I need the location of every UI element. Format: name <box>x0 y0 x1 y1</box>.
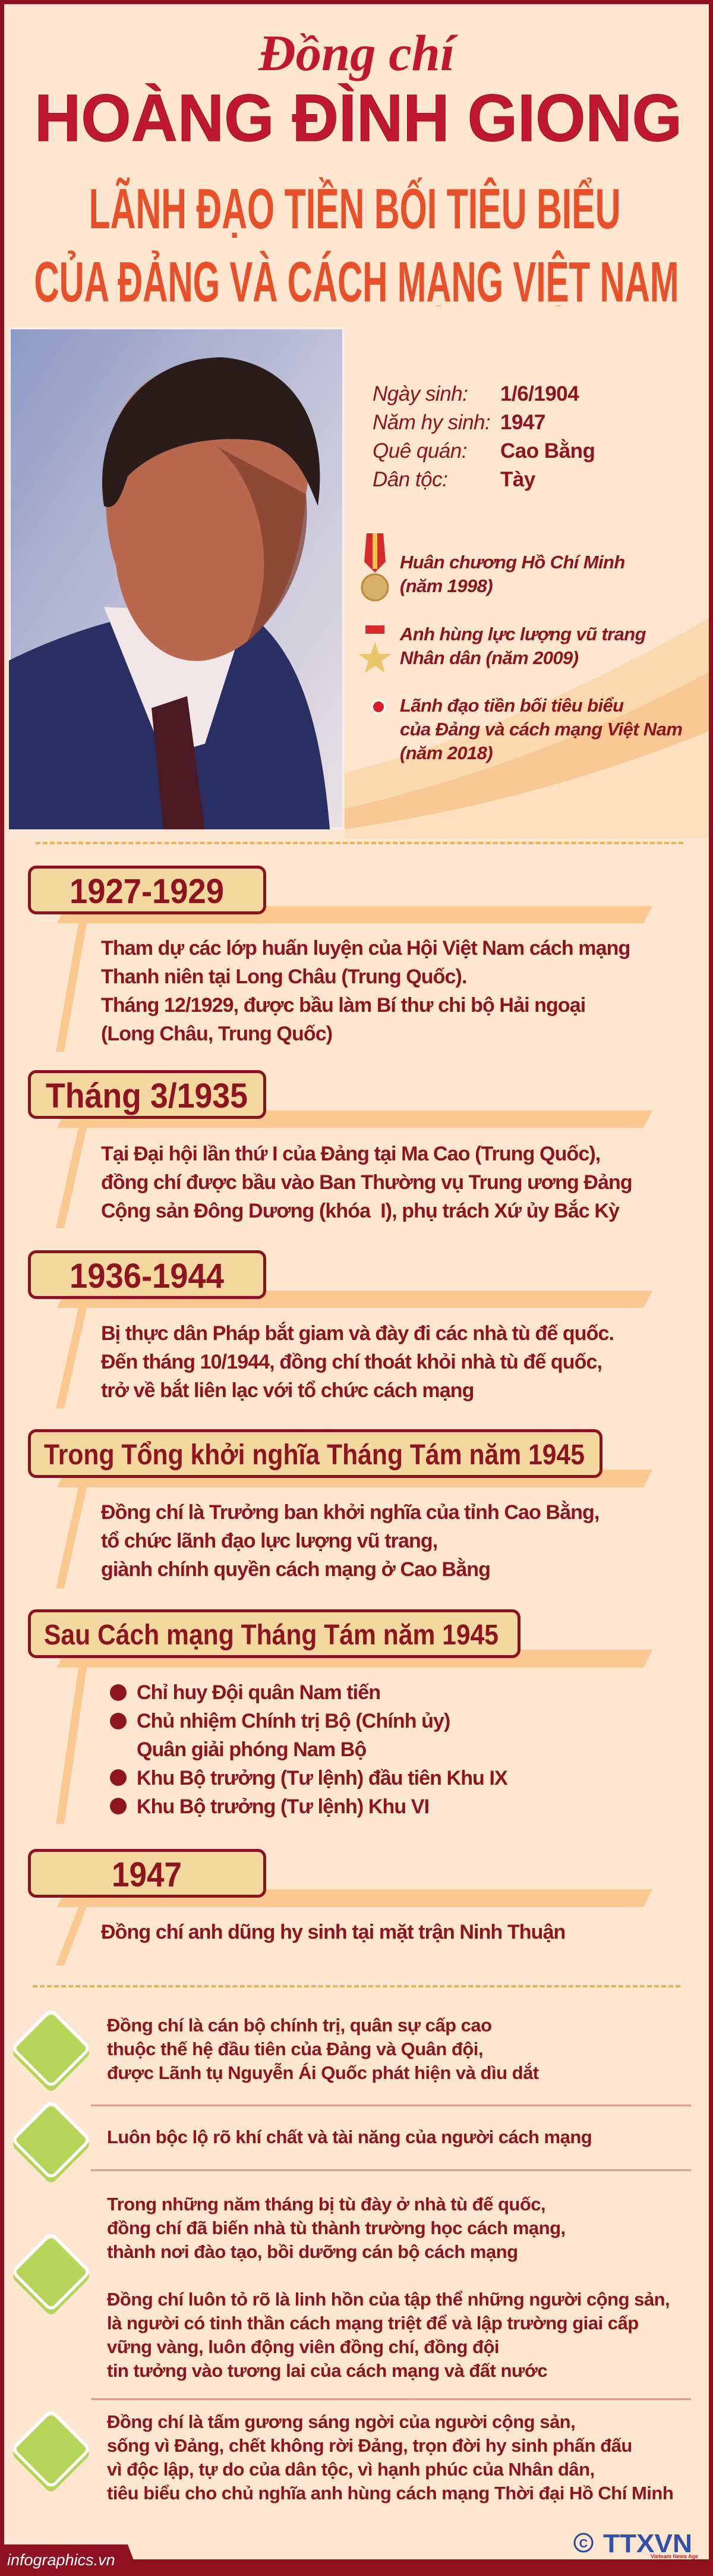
award 1 <box>400 552 625 596</box>
logo: TTXVN: C <box>579 2537 588 2550</box>
timeline section Tháng 3/1935: Tại Đại hội lần thứ I của Đảng tại Ma Cao (Trung Quốc), <box>101 1143 600 1165</box>
personal info: Năm hy sinh: <box>373 411 490 434</box>
bullet list <box>110 1681 507 1818</box>
personal info: 1/6/1904 <box>500 382 579 405</box>
quote 3: đồng chí đã biến nhà tù thành trường học cách mạng, <box>107 2218 566 2238</box>
timeline section Tổng khởi nghĩa 1945: giành chính quyền cách mạng ở Cao Bằng <box>101 1558 490 1581</box>
personal info: Dân tộc: <box>373 468 447 491</box>
timeline section 1936-1944: Đến tháng 10/1944, đồng chí thoát khỏi nhà tù đế quốc, <box>101 1351 602 1373</box>
award 1: (năm 1998) <box>400 575 493 596</box>
bullet list: Chỉ huy Đội quân Nam tiến <box>137 1681 380 1704</box>
quote 3: thành nơi đào tạo, bồi dưỡng cán bộ cách mạng <box>107 2241 518 2262</box>
timeline section Tháng 3/1935: Cộng sản Đông Dương (khóa I), phụ trách Xứ ủy Bắc Kỳ <box>101 1200 619 1222</box>
timeline section Tháng 3/1935: đồng chí được bầu vào Ban Thường vụ Trung ương Đảng <box>101 1171 632 1194</box>
quote 4: vững vàng, luôn động viên đồng chí, đồng đội <box>107 2336 499 2357</box>
quote 5 <box>107 2411 673 2503</box>
timeline section 1936-1944: 1936-1944 <box>70 1257 224 1295</box>
footer: infographics.vn: infographics.vn <box>7 2551 115 2569</box>
logo: TTXVN: TTXVN <box>603 2530 692 2558</box>
quote 1: Đồng chí là cán bộ chính trị, quân sự cấp cao <box>107 2015 492 2036</box>
logo: TTXVN <box>574 2530 698 2559</box>
award 3: của Đảng và cách mạng Việt Nam <box>400 719 682 740</box>
icon: red dot <box>373 702 384 712</box>
award 3 <box>400 695 682 763</box>
award 1: Huân chương Hồ Chí Minh <box>400 552 625 573</box>
bullet list: Chủ nhiệm Chính trị Bộ (Chính ủy) <box>137 1710 450 1732</box>
timeline section 1927-1929: (Long Châu, Trung Quốc) <box>101 1023 332 1045</box>
footer bar <box>0 2559 713 2576</box>
icon: diamonds <box>13 2011 89 2492</box>
quote 4 <box>107 2289 670 2381</box>
personal info: Cao Bằng <box>500 439 595 463</box>
personal info: Tày <box>500 468 535 491</box>
personal info <box>373 382 595 491</box>
timeline section 1927-1929: 1927-1929 <box>70 872 224 911</box>
timeline section 1927-1929 <box>28 866 652 1052</box>
award 3: Lãnh đạo tiền bối tiêu biểu <box>400 695 623 716</box>
quote 5: vì độc lập, tự do của dân tộc, vì hạnh phúc của Nhân dân, <box>107 2459 595 2480</box>
footer: infographics.vn <box>4 2544 133 2568</box>
icon: Ho Chi Minh medal <box>361 533 389 602</box>
bullet list: Khu Bộ trưởng (Tư lệnh) đầu tiên Khu IX <box>137 1767 507 1789</box>
decorative swoosh behind info <box>345 618 709 838</box>
quote 3: Trong những năm tháng bị tù đày ở nhà tù đế quốc, <box>107 2194 545 2215</box>
timeline section 1936-1944: Bị thực dân Pháp bắt giam và đày đi các nhà tù đế quốc. <box>101 1322 614 1345</box>
quote 3 <box>107 2194 566 2262</box>
quote 4: tin tưởng vào tương lai của cách mạng và đất nước <box>107 2360 547 2381</box>
timeline section Sau Cách mạng Tháng Tám <box>28 1609 652 1824</box>
timeline section Tổng khởi nghĩa 1945 <box>28 1429 652 1589</box>
quote 4: Đồng chí luôn tỏ rõ là linh hồn của tập thể những người cộng sản, <box>107 2289 670 2310</box>
timeline section Tổng khởi nghĩa 1945: tổ chức lãnh đạo lực lượng vũ trang, <box>101 1530 437 1552</box>
quote 4: là người có tinh thần cách mạng triệt để và lập trường giai cấp <box>107 2313 639 2333</box>
award 2 <box>399 624 646 668</box>
timeline section Tháng 3/1935 <box>28 1070 652 1228</box>
personal info: 1947 <box>500 411 545 434</box>
quote 1: được Lãnh tụ Nguyễn Ái Quốc phát hiện và dìu dắt <box>107 2062 539 2083</box>
timeline section 1927-1929: Tham dự các lớp huấn luyện của Hội Việt Nam cách mạng <box>101 937 630 960</box>
personal info: Ngày sinh: <box>373 382 468 405</box>
timeline section 1936-1944: trở về bắt liên lạc với tổ chức cách mạng <box>101 1379 474 1402</box>
quote 1: thuộc thế hệ đầu tiên của Đảng và Quân đội, <box>107 2039 483 2059</box>
quote 5: tiêu biểu cho chủ nghĩa anh hùng cách mạng Thời đại Hồ Chí Minh <box>107 2483 673 2503</box>
personal info: Quê quán: <box>373 439 467 463</box>
timeline section 1936-1944 <box>28 1250 652 1408</box>
quote 2: Luôn bộc lộ rõ khí chất và tài năng của người cách mạng <box>107 2127 592 2147</box>
quote 5: sống vì Đảng, chết không rời Đảng, trọn đời hy sinh phấn đấu <box>107 2435 632 2456</box>
quote 1 <box>107 2015 539 2083</box>
timeline section 1947: Đồng chí anh dũng hy sinh tại mặt trận Ninh Thuận <box>101 1921 565 1943</box>
award 2: Nhân dân (năm 2009) <box>400 647 578 668</box>
portrait photo <box>9 328 344 829</box>
title: Đồng chí: Đồng chí <box>258 24 458 81</box>
award 2: Anh hùng lực lượng vũ trang <box>400 624 646 644</box>
quote 5: Đồng chí là tấm gương sáng ngời của người cộng sản, <box>107 2411 575 2432</box>
timeline section Tháng 3/1935: Tháng 3/1935 <box>46 1077 248 1115</box>
icon: hero star <box>358 625 392 673</box>
bullet list: Khu Bộ trưởng (Tư lệnh) Khu VI <box>137 1795 429 1818</box>
timeline section 1927-1929: Thanh niên tại Long Châu (Trung Quốc). <box>101 965 467 988</box>
timeline section 1947: 1947 <box>112 1855 182 1894</box>
timeline section 1927-1929: Tháng 12/1929, được bầu làm Bí thư chi bộ Hải ngoại <box>101 994 585 1017</box>
timeline section Tổng khởi nghĩa 1945: Đồng chí là Trưởng ban khởi nghĩa của tỉnh Cao Bằng, <box>101 1501 599 1524</box>
timeline section 1947 <box>28 1849 652 1965</box>
bullet list: Quân giải phóng Nam Bộ <box>137 1738 366 1761</box>
award 3: (năm 2018) <box>400 743 493 763</box>
